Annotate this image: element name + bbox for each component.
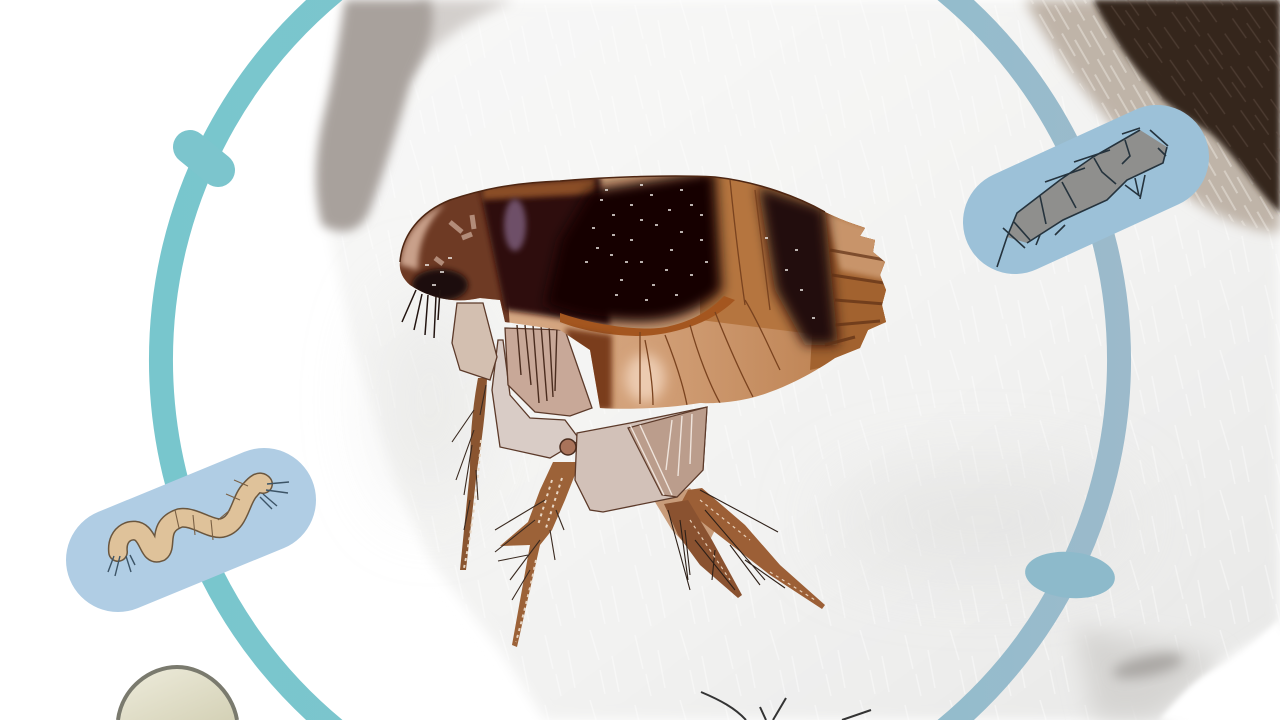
- fur: dark patch hair: [1100, 0, 1280, 205]
- fur: grey spot bottom right: [1075, 625, 1220, 720]
- flea: hind leg: [655, 488, 825, 609]
- illustration: adult flea: [395, 170, 900, 647]
- pill: larva stage: [108, 480, 289, 576]
- flea: lower head dark mouth: [412, 269, 468, 301]
- flea: fore leg: [452, 378, 487, 570]
- flea: fore coxa: [452, 303, 497, 380]
- ring connector: lower right knob: [1023, 548, 1117, 602]
- flea: mid coxa and femur: [492, 340, 580, 458]
- flea: leg joint: [560, 439, 576, 455]
- fur: dark core of spot: [1111, 649, 1185, 683]
- fur: fine hair texture: [322, 0, 1280, 720]
- flea: purple sheen: [504, 199, 526, 251]
- cat fur: [316, 0, 1280, 720]
- flea: mid plate bristles: [517, 325, 557, 403]
- flea: mid leg: [495, 462, 580, 647]
- flea: segment lines: [640, 180, 780, 405]
- flea: body rim: [400, 176, 825, 262]
- flea: hind foot wedge: [655, 488, 715, 560]
- flea: pale head front: [400, 204, 445, 270]
- flea: thorax brown region: [478, 175, 610, 325]
- flea: belly highlight: [625, 354, 665, 402]
- flea: abdomen base: [395, 170, 895, 415]
- life cycle ring: [161, 0, 1119, 720]
- fur: grey patch top left: [316, 0, 433, 231]
- flea: head: [400, 192, 510, 323]
- flea: hind coxa: [575, 407, 707, 512]
- fur: white corner bottom right: [1160, 620, 1280, 720]
- flea: head highlights: [435, 215, 474, 264]
- fur: beige fringe top right: [1025, 0, 1280, 232]
- fur: soft shade patches: [385, 290, 1130, 565]
- flea: dark thorax band: [545, 170, 722, 322]
- flea: upper tan band: [700, 178, 886, 340]
- flea: mid plate: [505, 328, 592, 416]
- icon: larva: [108, 480, 289, 576]
- icon: adult flea legs at bottom: [701, 692, 871, 720]
- flea: rear dark band: [758, 186, 838, 345]
- flea: hind coxa ridges: [630, 414, 692, 495]
- flea: dark base under thorax: [565, 328, 612, 410]
- icon: pupa: [997, 128, 1168, 267]
- ring: left arc: [161, 0, 338, 720]
- flea: hind upper branch: [680, 488, 825, 609]
- flea: hind coxa inner plate: [628, 407, 707, 497]
- flea: rear segment: [810, 212, 886, 370]
- fur: grey wash at top: [405, 0, 515, 80]
- ring connector: upper left knob: [190, 147, 218, 170]
- flea: head bristles: [402, 290, 440, 338]
- flea: body: [395, 170, 900, 415]
- flea: hind lower branch: [664, 500, 742, 598]
- flea: rear bristle shading: [825, 250, 885, 345]
- flea: rear pale top: [825, 212, 890, 280]
- fur: dark patch top right: [1093, 0, 1280, 213]
- flea: thorax orange plate: [560, 296, 735, 336]
- fur: white coat: [320, 0, 1280, 720]
- ring: right arc: [942, 0, 1119, 720]
- flea: white specks: [425, 185, 815, 318]
- fur: fringe strands: [1025, 0, 1280, 232]
- pill: pupa stage: [997, 128, 1168, 267]
- flea: top orange strip: [482, 178, 595, 200]
- icon: egg: [118, 667, 237, 720]
